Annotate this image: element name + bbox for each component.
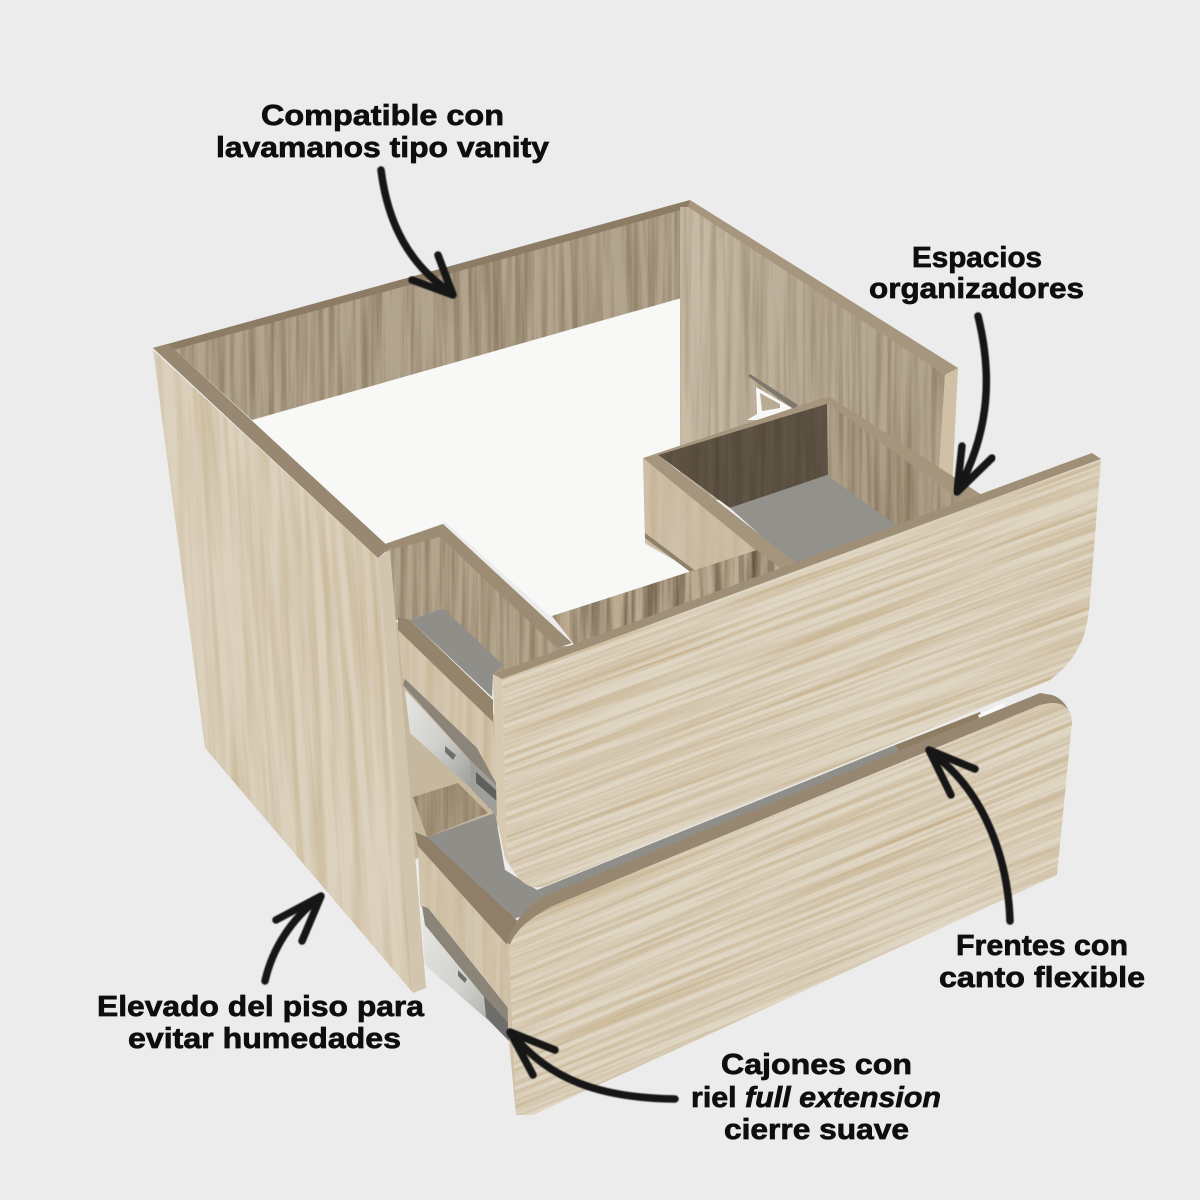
panel: left small compartment <box>380 524 580 722</box>
compartment dark back wall <box>658 404 828 508</box>
panel: left top edge <box>153 344 390 558</box>
compartment top edges <box>643 397 985 570</box>
heading: Compatible con lavamanos tipo vanity <box>216 100 549 164</box>
arrow: frentes <box>929 750 1010 921</box>
panel: lower drawer side edge <box>507 943 533 1115</box>
panel: upper drawer top strip <box>493 453 1101 679</box>
heading: Frentes con canto flexible <box>939 930 1145 994</box>
heading: Cajones con riel: riel full extension <box>691 1082 941 1114</box>
panel: left outer side <box>153 350 413 993</box>
heading: Elevado del piso <box>97 991 425 1055</box>
panel: right wall top edge <box>688 200 958 375</box>
heading: Frentes con canto flexible: canto flexible <box>939 962 1145 994</box>
panel: lower drawer front <box>509 703 1072 1115</box>
panel: lower drawer left strip <box>415 832 522 948</box>
panel: upper drawer front <box>502 459 1101 888</box>
panel: lower drawer gap wood <box>895 712 983 752</box>
panel: upper drawer side <box>398 630 496 780</box>
icon: upper full extension rail <box>403 679 498 817</box>
heading: Compatible con lavamanos tipo vanity: lavamanos tipo vanity <box>216 132 549 164</box>
heading: Espacios organizadores: Espacios <box>912 242 1042 274</box>
panel: right wall inner face <box>680 207 945 500</box>
heading: Compatible con lavamanos tipo vanity: Compatible con <box>261 100 504 132</box>
panel: lower drawer side <box>418 847 508 1008</box>
panel: back wall inner face <box>175 210 680 420</box>
compartment walls <box>386 537 570 676</box>
panel: wood behind lower drawer <box>413 783 488 837</box>
panel: right wall front edge <box>938 368 958 490</box>
heading: Cajones con riel: cierre suave <box>724 1114 909 1146</box>
panel: back wall top edge <box>153 200 692 350</box>
compartment grey floor <box>410 608 503 697</box>
arrow: espacios <box>957 316 992 492</box>
panel: left front edge <box>378 550 426 993</box>
arrow: vanity <box>381 170 453 295</box>
heading: Cajones con riel <box>691 1049 941 1146</box>
cabinet <box>153 200 1101 1115</box>
white gap <box>978 703 1006 722</box>
arrow: cajones <box>510 1032 675 1099</box>
compartment slot line <box>645 533 697 574</box>
heading: Elevado del piso: Elevado del piso para <box>97 991 425 1023</box>
heading: Elevado del piso: evitar humedades <box>128 1023 401 1055</box>
drawer strip <box>398 617 493 722</box>
icon: lower full extension rail <box>422 906 510 1042</box>
compartment outer side <box>643 458 756 570</box>
panel: wood base behind upper rail <box>395 620 500 860</box>
panel: upper drawer side edge <box>493 674 514 872</box>
icon: rear drawer rail <box>747 374 798 420</box>
compartment grey floor <box>730 475 900 566</box>
white interior opening <box>250 295 695 616</box>
panel: lower drawer grey floor <box>427 745 900 925</box>
heading: Espacios organizadores <box>869 242 1084 305</box>
compartment top edge <box>382 524 572 648</box>
heading: Frentes con canto flexible: Frentes con <box>956 930 1128 962</box>
arrow: elevado <box>265 896 321 981</box>
panel: lower drawer top strip <box>507 693 1072 952</box>
panel: organiser compartment <box>643 397 980 572</box>
compartment right wall <box>828 406 958 526</box>
panel: middle wood behind front <box>552 550 780 651</box>
heading: Cajones con riel: Cajones con <box>721 1049 912 1081</box>
heading: Espacios organizadores: organizadores <box>869 273 1084 305</box>
